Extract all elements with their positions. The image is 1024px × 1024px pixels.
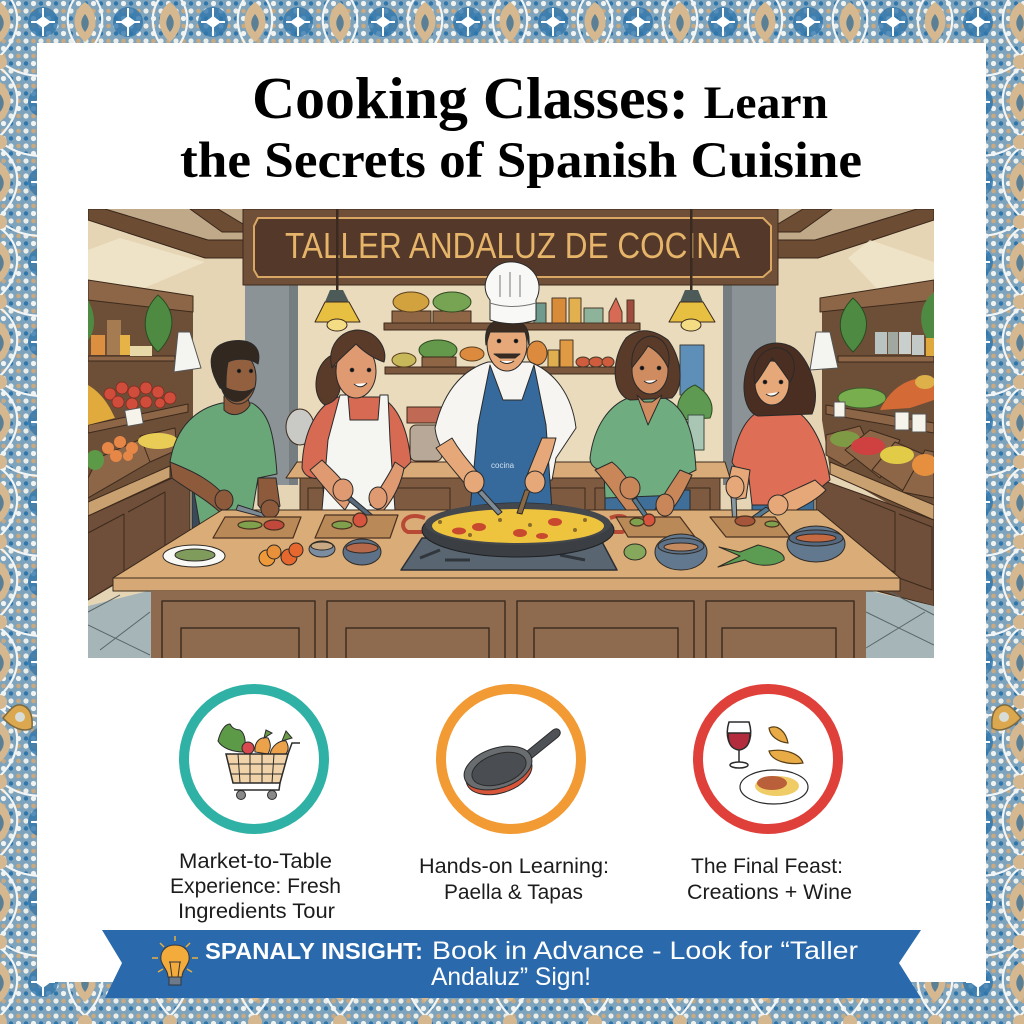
label: [170, 850, 341, 923]
banner text: SPANALY INSIGHT:: [205, 938, 423, 964]
feature: the final feast: [687, 689, 852, 904]
background wall: [88, 220, 934, 606]
person: woman in white apron: [302, 330, 411, 512]
cloths: [174, 332, 838, 372]
icon ring: teal: [184, 689, 324, 829]
icon: bread: [769, 727, 803, 764]
sign: TALLER ANDALUZ DE COCINA: [285, 225, 740, 266]
banner text: Andaluz” Sign!: [431, 963, 591, 991]
person: chef: cocina: [491, 461, 515, 470]
label: Experience: Fresh: [170, 875, 341, 898]
back counter: [286, 407, 730, 518]
label: [687, 855, 852, 904]
person: woman in coral: [729, 343, 830, 523]
icon ring: red: [698, 689, 838, 829]
icon: shopping cart with vegetables: [218, 724, 300, 800]
label: The Final Feast:: [691, 855, 843, 878]
back wall: [298, 285, 723, 475]
back wall shelves with jars and produce: [384, 292, 640, 374]
sign: [243, 209, 778, 285]
ceiling left: [88, 209, 243, 292]
hands and knives: [214, 470, 788, 516]
banner text: Book in Advance - Look for “Taller: [432, 937, 858, 965]
icon: plate of food: [740, 770, 808, 804]
label: Hands-on Learning:: [419, 855, 609, 878]
banner text: [205, 937, 858, 991]
lamp right: [669, 209, 715, 331]
icon: right gold medallion: [992, 705, 1021, 730]
label: Ingredients Tour: [178, 900, 335, 923]
title: the Secrets of Spanish Cuisine: [180, 133, 862, 189]
feature: hands-on learning: [419, 689, 609, 904]
grey pillars: [245, 285, 776, 485]
ceiling right: [778, 209, 934, 292]
main island counter: [113, 510, 900, 658]
paella pan: [403, 503, 629, 557]
person: woman in green: [590, 331, 696, 522]
left market shelving: [86, 280, 193, 600]
title: Cooking Classes: Learn: [252, 65, 828, 131]
title: [180, 65, 862, 189]
icon: light bulb: [152, 936, 198, 985]
illustration: cooking class scene: [86, 209, 938, 658]
cutting boards: [213, 513, 790, 538]
person: man in green: [170, 340, 280, 528]
label: Paella & Tapas: [444, 881, 583, 904]
floor tiles: [88, 588, 934, 658]
label: Creations + Wine: [687, 881, 852, 904]
right market shelving: [816, 280, 938, 606]
feature: market-to-table: [170, 689, 341, 923]
banner: insight: [102, 930, 921, 998]
label: [419, 855, 609, 904]
icon ring: orange: [441, 689, 581, 829]
back fridge and plant: [678, 345, 712, 450]
icon: left gold medallion: [3, 705, 32, 730]
icon: frying pan: [459, 729, 560, 803]
label: Market-to-Table: [179, 850, 332, 873]
icon: wine glass: [727, 722, 751, 768]
food items on island: [163, 526, 845, 570]
person: chef: [435, 262, 576, 510]
stove: [401, 538, 617, 570]
lamp left: [315, 209, 360, 331]
